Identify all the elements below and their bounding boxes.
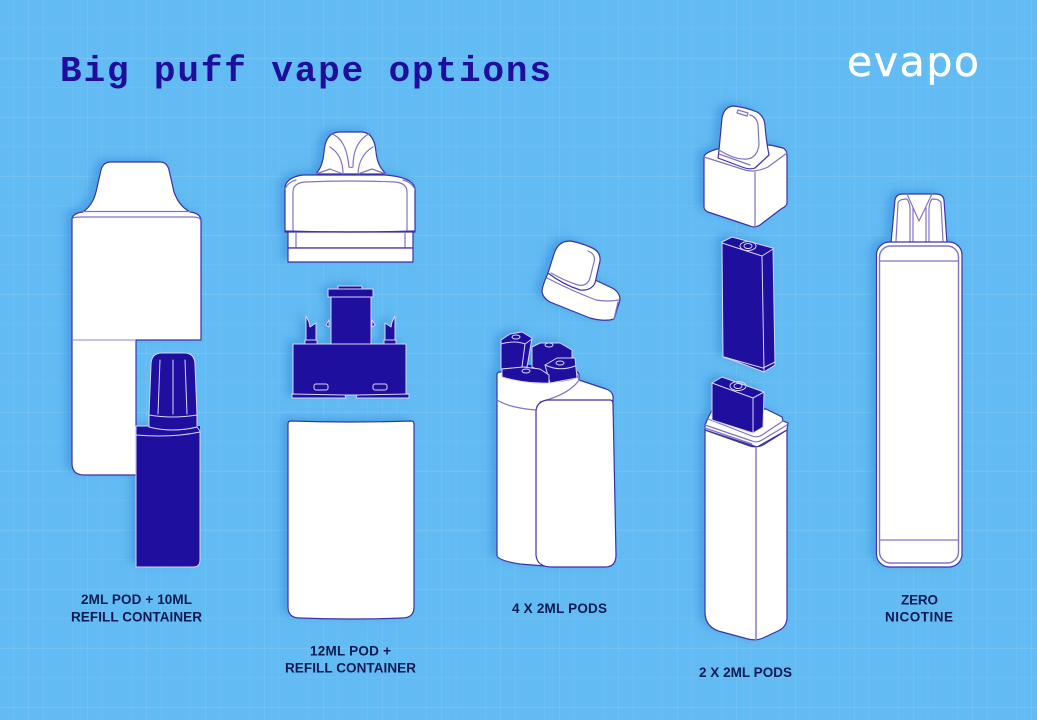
label: 12ml pod + refill container: 12ML POD + (310, 644, 391, 658)
mouthpiece (891, 194, 947, 243)
label: zero nicotine: ZERO (901, 592, 938, 608)
device: zero nicotine (876, 194, 962, 567)
device: 2ml pod and refill container (72, 162, 201, 567)
refill bottle (136, 353, 200, 567)
logo: evapo: evapo (847, 38, 979, 86)
device: 2 x 2ml pods (704, 106, 788, 640)
label: 2ml pod + 10ml refill container (71, 592, 202, 624)
device: 4 x 2ml pods (497, 241, 620, 567)
device: 12ml pod and refill container (285, 132, 415, 619)
label: zero nicotine (885, 592, 953, 624)
navy pod cartridge (722, 237, 775, 372)
body (876, 242, 962, 567)
label: 12ml pod + refill container (285, 644, 416, 676)
top cap (285, 132, 415, 262)
lower body with inserted pod (705, 377, 788, 640)
refill tank (288, 421, 414, 619)
label: zero nicotine: NICOTINE (885, 610, 953, 624)
label: 2ml pod + 10ml refill container: 2ML POD + 10ML (81, 592, 192, 607)
pod body with cap (72, 162, 201, 475)
top cap (704, 106, 787, 228)
label: 12ml pod + refill container: REFILL CONTAINER (285, 660, 416, 676)
internal core (292, 286, 409, 398)
label: 2 x 2ml pods: 2 X 2ML PODS (699, 665, 792, 680)
label: 4 x 2ml pods: 4 X 2ML PODS (512, 601, 607, 616)
tilted cap (542, 241, 620, 320)
title: Big puff vape options (60, 51, 551, 92)
four pods (501, 332, 578, 383)
navy pod inserted (712, 377, 764, 433)
vape body with pods (497, 332, 616, 567)
label: 2ml pod + 10ml refill container: REFILL CONTAINER (71, 610, 202, 624)
